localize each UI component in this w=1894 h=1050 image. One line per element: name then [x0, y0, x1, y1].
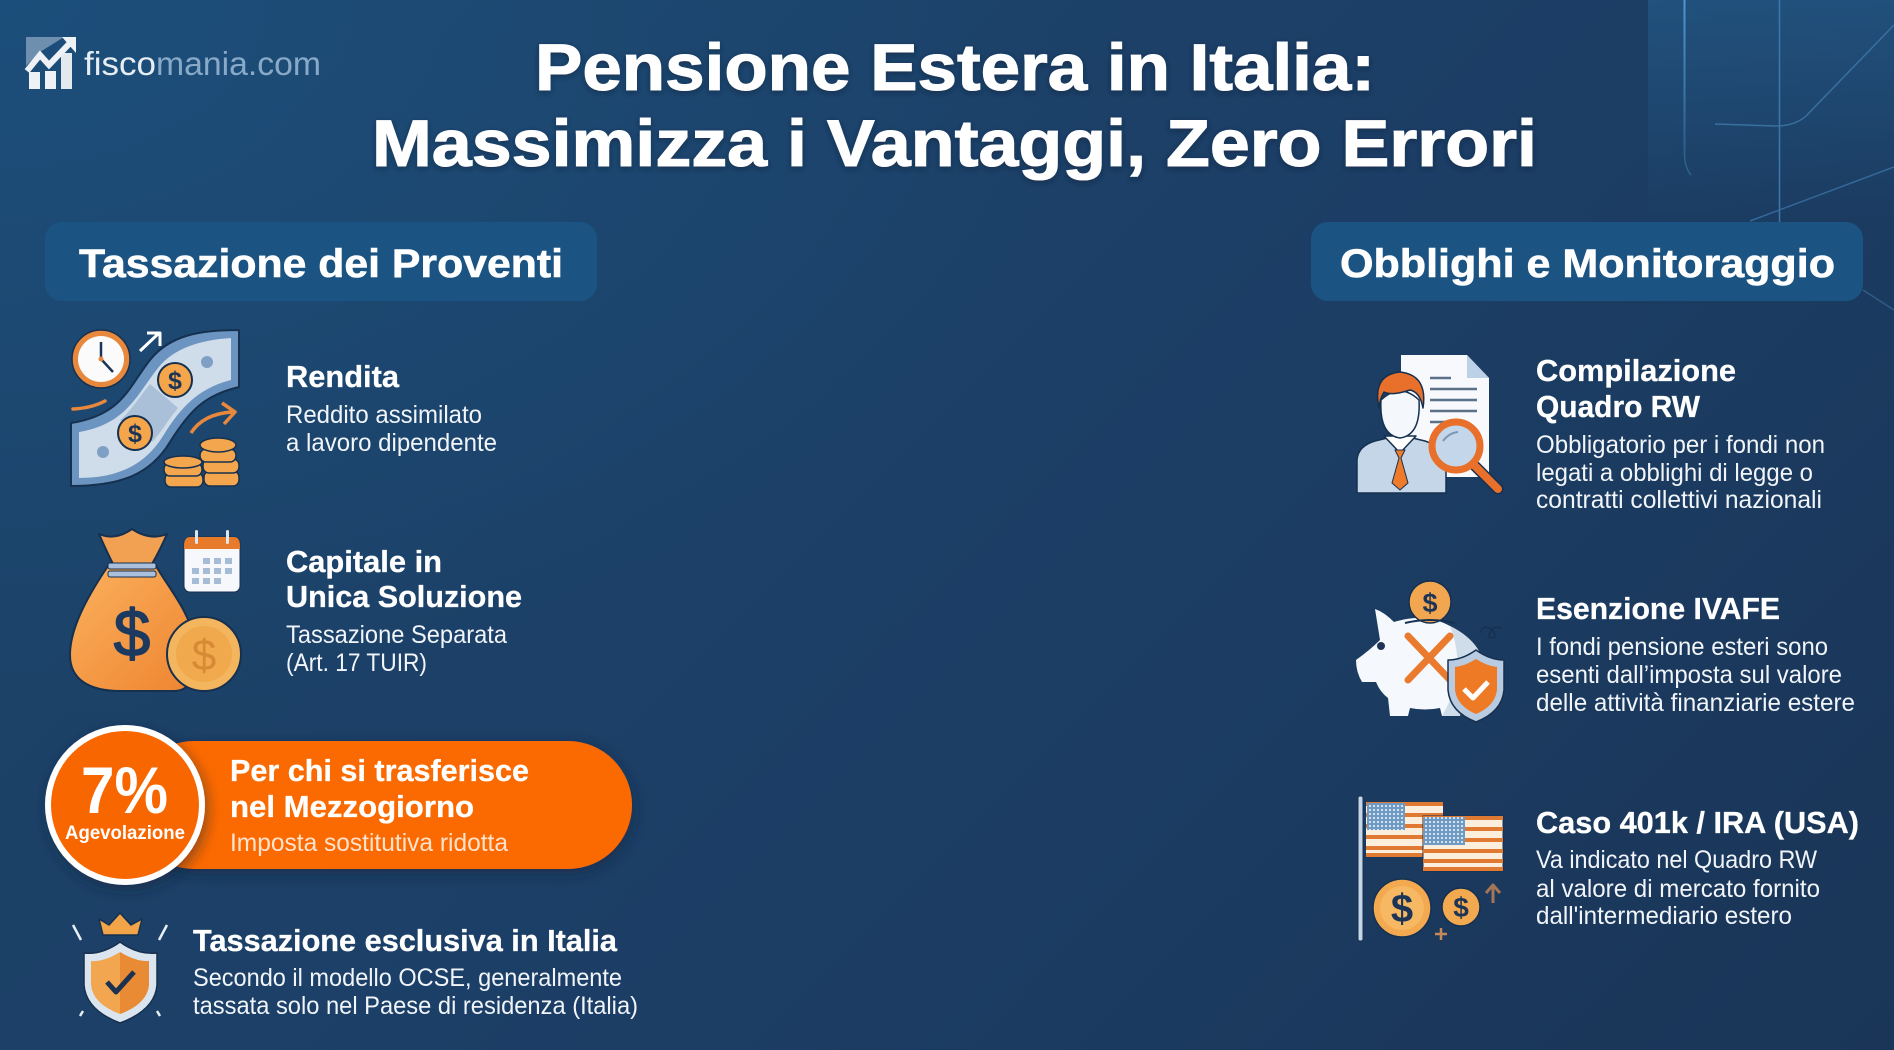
text: 401k: Va indicato nel Quadro RW — [1536, 846, 1817, 874]
text: esclusiva: Tassazione esclusiva in Italia — [193, 923, 618, 958]
text: esclusiva: tassata solo nel Paese di residenza (Italia) — [193, 992, 638, 1020]
item: Rendita — [71, 330, 497, 487]
text: Rendita: Rendita — [286, 359, 400, 394]
text: 401k: al valore di mercato fornito — [1536, 875, 1820, 903]
text: IVAFE — [1536, 591, 1855, 717]
callout text: nel Mezzogiorno — [230, 789, 474, 824]
icon: money bag, coin and calendar: $ — [114, 596, 150, 670]
title: Pensione Estera in Italia: — [535, 30, 1375, 104]
badge circle — [48, 728, 202, 882]
text: Quadro RW: Quadro RW — [1536, 389, 1701, 424]
badge circle: 7% — [81, 753, 168, 827]
icon: banknote, clock and coins: $ — [168, 367, 182, 395]
icon: person, document and magnifier — [1357, 355, 1498, 493]
icon: banknote, clock and coins: $ — [128, 420, 142, 448]
icon: US flags and coins: $ — [1453, 892, 1469, 923]
logo — [26, 37, 321, 89]
logo text — [84, 45, 321, 82]
callout text — [230, 753, 529, 857]
icon: money bag, coin and calendar: $ — [192, 631, 216, 680]
text: IVAFE: delle attività finanziarie estere — [1536, 689, 1855, 717]
text: Capitale: (Art. 17 TUIR) — [286, 649, 427, 677]
text: Capitale: Unica Soluzione — [286, 579, 522, 614]
text: Quadro RW: Compilazione — [1536, 353, 1736, 388]
logo icon — [26, 37, 76, 89]
callout text: Per chi si trasferisce — [230, 753, 529, 788]
item: Compilazione Quadro RW — [1357, 353, 1825, 514]
logo text: mania.com — [156, 45, 321, 82]
icon: piggy bank with shield: $ — [1422, 588, 1438, 618]
icon: crowned shield — [73, 913, 167, 1023]
title: Massimizza i Vantaggi, Zero Errori — [372, 106, 1537, 180]
icon: piggy bank with shield — [1356, 581, 1504, 722]
callout: 7% Agevolazione — [48, 728, 632, 882]
item: Capitale in Unica Soluzione — [70, 529, 522, 691]
panel heading: Tassazione dei Proventi: Tassazione dei Proventi — [79, 242, 563, 286]
panel heading: Obblighi e Monitoraggio — [1311, 222, 1863, 301]
text: Capitale — [286, 544, 522, 677]
text: Quadro RW: contratti collettivi nazionali — [1536, 486, 1822, 514]
orange pill — [130, 741, 632, 869]
text: 401k — [1536, 805, 1859, 930]
item: Caso 401k / IRA (USA) — [1358, 796, 1859, 941]
title — [372, 30, 1537, 180]
text: 401k: Caso 401k / IRA (USA) — [1536, 805, 1859, 840]
text: 401k: dall'intermediario estero — [1536, 902, 1792, 930]
icon: US flags and coins: $ — [1391, 887, 1413, 931]
text: Capitale: Tassazione Separata — [286, 621, 507, 649]
text: esclusiva — [193, 923, 638, 1020]
badge circle: Agevolazione — [65, 823, 185, 844]
callout text: Imposta sostitutiva ridotta — [230, 829, 508, 857]
text: Quadro RW — [1536, 353, 1825, 514]
icon: US flags and coins — [1358, 796, 1503, 941]
item: Tassazione esclusiva in Italia — [73, 913, 638, 1023]
text: IVAFE: Esenzione IVAFE — [1536, 591, 1780, 626]
logo text: fisco — [84, 45, 156, 82]
icon: banknote, clock and coins — [71, 330, 239, 487]
text: Rendita: Reddito assimilato — [286, 401, 482, 429]
text: Rendita: a lavoro dipendente — [286, 429, 497, 457]
item: Esenzione IVAFE — [1356, 581, 1855, 722]
text: Quadro RW: Obbligatorio per i fondi non — [1536, 431, 1825, 459]
text: IVAFE: esenti dall’imposta sul valore — [1536, 661, 1842, 689]
text: IVAFE: I fondi pensione esteri sono — [1536, 633, 1828, 661]
text: Capitale: Capitale in — [286, 544, 442, 579]
text: esclusiva: Secondo il modello OCSE, generalmente — [193, 964, 622, 992]
text: Quadro RW: legati a obblighi di legge o — [1536, 459, 1813, 487]
panel heading: Obblighi e Monitoraggio: Obblighi e Monitoraggio — [1340, 242, 1835, 286]
text: Rendita — [286, 359, 497, 457]
icon: money bag, coin and calendar — [70, 529, 241, 691]
panel heading: Tassazione dei Proventi — [45, 222, 597, 301]
